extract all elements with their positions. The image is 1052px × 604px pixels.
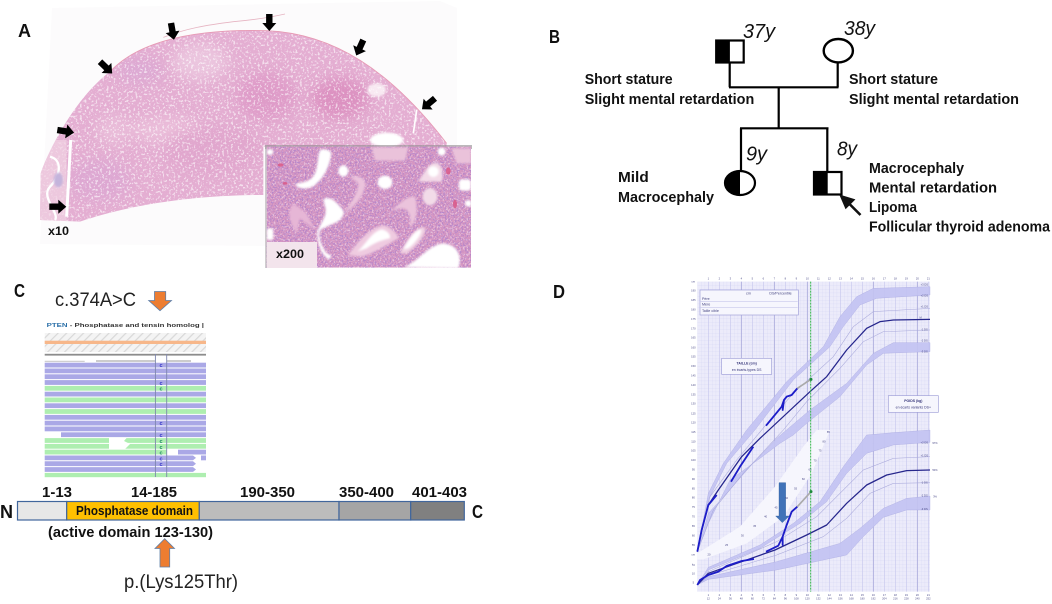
variant base calls: c (159, 439, 163, 445)
legend box: cm (746, 291, 751, 295)
axis tick labels: 140 (691, 383, 696, 387)
axis tick labels: 80 (692, 496, 695, 500)
axis tick labels: 10 (806, 593, 809, 597)
axis tick labels: 97% (932, 441, 938, 445)
patient weight measurements (697, 507, 797, 585)
heading: A: A (18, 21, 31, 41)
axis tick labels: 168 (849, 597, 854, 601)
axis tick labels: 60 (802, 477, 805, 481)
axis tick labels: 84 (773, 597, 776, 601)
ages: 37y (743, 21, 776, 43)
axis tick labels: 95 (692, 467, 695, 471)
daughter phenotype (618, 170, 714, 206)
weight label box: POIDS (kg) (904, 399, 922, 403)
target age marker (809, 282, 812, 592)
mother phenotype (849, 72, 1019, 108)
axis tick labels: 14 (850, 276, 853, 280)
axis tick labels: 70 (692, 515, 695, 519)
axis tick labels: 17 (883, 276, 886, 280)
label: x200 (267, 242, 317, 268)
father phenotype: Short stature (585, 72, 673, 88)
axis tick labels: 125 (691, 411, 696, 415)
pedigree connecting lines (729, 63, 838, 172)
variant label c.374A>C: c.374A>C (55, 290, 136, 311)
axis tick labels: +1 DS (921, 305, 928, 309)
axis tick labels: 30 (741, 534, 744, 538)
axis tick labels: 120 (805, 597, 810, 601)
axis tick labels: 25 (725, 543, 729, 547)
axis tick labels: 85 (692, 486, 695, 490)
axis tick labels: 13 (839, 593, 842, 597)
growth curves plot (691, 276, 938, 601)
axis tick labels: 65 (809, 468, 812, 472)
axis tick labels: 145 (691, 373, 696, 377)
axis tick labels: cm (692, 553, 696, 556)
axis tick labels: 5 (693, 581, 695, 585)
axis tick labels: +2 DS (921, 294, 928, 298)
axis tick labels: 21 (927, 276, 930, 280)
axis tick labels: 36 (729, 597, 732, 601)
weight scale band (697, 430, 830, 559)
axis tick labels: 130 (691, 402, 696, 406)
sequencing read viewer (45, 323, 206, 477)
panel B: pedigree (549, 18, 1051, 236)
variant base calls: c (159, 433, 163, 439)
axis tick labels: 2 (719, 593, 721, 597)
variant base calls: c (159, 386, 163, 392)
label: x200: x200 (276, 247, 304, 261)
axis tick labels: 40 (764, 515, 768, 519)
axis tick labels: 1 (708, 593, 710, 597)
plot grid (697, 282, 930, 592)
axis tick labels: 60 (692, 533, 695, 537)
weight label box: en écarts variants DS+ (896, 406, 931, 410)
heading: B: B (549, 27, 560, 47)
axis tick labels: 4 (741, 593, 743, 597)
mother symbol (824, 39, 853, 62)
axis tick labels: 228 (904, 597, 909, 601)
axis tick labels: cm (692, 280, 696, 283)
legend box: DS/Percentile (769, 291, 792, 295)
axis tick labels: 5 (752, 276, 754, 280)
axis tick labels: 1 (708, 276, 710, 280)
axis tick labels: 8 (785, 593, 787, 597)
mother phenotype: Short stature (849, 72, 938, 88)
viewer title: PTEN - Phosphatase and tensin homolog | (47, 323, 204, 329)
proband arrow (842, 196, 860, 215)
axis tick labels: 155 (691, 355, 696, 359)
father phenotype (585, 72, 754, 108)
axis tick labels: 10 (692, 571, 695, 575)
axis tick labels: 3 (730, 593, 732, 597)
axis tick labels: 12 (828, 593, 831, 597)
patient height measurements (697, 388, 797, 552)
axis tick labels: 5 (752, 593, 754, 597)
variant base calls: c (159, 450, 163, 456)
height label box: TAILLE (cm) (737, 362, 757, 366)
orange up arrow (155, 539, 174, 567)
axis tick labels: 11 (817, 593, 820, 597)
domain ranges: 1-13 (42, 485, 72, 501)
arrows marking the capsule (49, 14, 439, 214)
weight median (697, 470, 930, 585)
axis tick labels: 156 (838, 597, 843, 601)
proband phenotype: Mental retardation (869, 181, 997, 197)
axis tick labels: 80 (823, 439, 826, 443)
axis tick labels: 6 (763, 593, 765, 597)
axis tick labels: 16 (872, 593, 875, 597)
axis tick labels: 20 (916, 593, 919, 597)
variant base calls: c (159, 456, 163, 462)
panel A: histology (18, 1, 472, 268)
mother phenotype: Slight mental retardation (849, 92, 1019, 108)
axis tick labels: 20 (708, 552, 711, 556)
heading: C: C (14, 281, 25, 301)
ages: 9y (746, 144, 768, 166)
domain ranges: 14-185 (131, 485, 177, 501)
blue arrow (776, 483, 789, 523)
axis tick labels: 180 (860, 597, 865, 601)
axis tick labels: 18 (894, 593, 897, 597)
domain ranges: 350-400 (339, 485, 394, 501)
inset micrograph x200 (265, 145, 472, 268)
projected points (797, 378, 812, 507)
axis tick labels: 13 (839, 276, 842, 280)
axis tick labels: 20 (916, 276, 919, 280)
axis tick labels: 24 (718, 597, 721, 601)
daughter symbol (725, 171, 755, 195)
axis tick labels: 70 (814, 459, 817, 463)
axis tick labels: 85 (827, 430, 830, 434)
axis tick labels: 96 (784, 597, 787, 601)
axis tick labels: 19 (905, 276, 908, 280)
axis tick labels: 7 (774, 276, 776, 280)
axis tick labels: 21 (927, 593, 930, 597)
panel D: growth chart (553, 276, 938, 601)
axis tick labels: -2 DS (921, 494, 928, 498)
axis tick labels: 35 (753, 524, 757, 528)
axis tick labels: 185 (691, 298, 696, 302)
axis tick labels: -3 DS (921, 507, 928, 511)
axis tick labels: +1 DS (921, 454, 928, 458)
protein variant label: p.(Lys125Thr) (124, 572, 238, 593)
active domain label: (active domain 123-130) (48, 525, 213, 541)
axis tick labels: 204 (882, 597, 887, 601)
axis tick labels: 108 (794, 597, 799, 601)
axis tick labels: 55 (794, 487, 798, 491)
daughter phenotype: Mild (618, 170, 649, 186)
axis tick labels: 48 (740, 597, 743, 601)
weight percentile bands (697, 430, 930, 585)
axis tick labels (691, 276, 938, 601)
axis tick labels: 240 (915, 597, 920, 601)
axis tick labels: 192 (871, 597, 876, 601)
slide background (40, 1, 457, 246)
axis tick labels: 150 (691, 364, 696, 368)
axis tick labels: 17 (883, 593, 886, 597)
axis tick labels: 19 (905, 593, 908, 597)
axis tick labels: 100 (691, 458, 696, 462)
phosphatase domain label: Phosphatase domain (76, 503, 193, 518)
ages (743, 18, 876, 166)
domain ranges: 190-350 (240, 485, 295, 501)
axis tick labels: 3 (730, 276, 732, 280)
weight label box (888, 396, 938, 412)
protein domain bar (18, 502, 464, 520)
axis tick labels: 175 (691, 317, 696, 321)
axis tick labels: 16 (872, 276, 875, 280)
variant column (155, 354, 167, 477)
axis tick labels: 105 (691, 449, 696, 453)
height label box (722, 358, 772, 374)
variant base calls: c (159, 462, 163, 468)
height percentile bands (697, 287, 930, 552)
legend box: Mère (702, 303, 710, 307)
C terminus: C (472, 502, 483, 522)
legend box: Taille cible (702, 309, 719, 313)
axis tick labels: 165 (691, 336, 696, 340)
variant base calls: c (159, 445, 163, 451)
ages: 8y (837, 139, 858, 161)
axis tick labels: kg (692, 562, 695, 566)
domain ranges (42, 485, 467, 501)
height label box: en écarts-types DS (732, 368, 762, 372)
axis tick labels: 75 (692, 505, 695, 509)
axis tick labels: 7 (774, 593, 776, 597)
axis tick labels: 2 (719, 276, 721, 280)
N terminus: N (0, 502, 13, 522)
label: x10: x10 (48, 224, 69, 238)
axis tick labels: 12 (707, 597, 710, 601)
father symbol (716, 40, 744, 62)
axis tick labels: 50% (932, 468, 938, 472)
orange down arrow (149, 292, 172, 311)
ages: 38y (844, 18, 876, 40)
axis tick labels: 90 (692, 477, 695, 481)
axis tick labels: 65 (692, 524, 695, 528)
variant base calls: c (159, 363, 163, 369)
proband phenotype: Macrocephaly (869, 161, 964, 177)
legend box (700, 290, 798, 315)
proband phenotype: Follicular thyroid adenoma (869, 220, 1051, 236)
axis tick labels: 18 (894, 276, 897, 280)
low-power tissue section x10 (33, 14, 453, 227)
axis tick labels: -1 DS (921, 327, 928, 331)
father phenotype: Slight mental retardation (585, 92, 754, 108)
axis tick labels: 14 (850, 593, 853, 597)
panel C: sequencing and protein domains (0, 281, 483, 593)
axis tick labels: 135 (691, 392, 696, 396)
axis tick labels: -3 DS (921, 350, 928, 354)
axis tick labels: 8 (785, 276, 787, 280)
axis tick labels: 216 (893, 597, 898, 601)
daughter phenotype: Macrocephaly (618, 190, 714, 206)
axis tick labels: 15 (861, 593, 864, 597)
axis tick labels: 110 (691, 439, 696, 443)
axis tick labels: 120 (691, 421, 696, 425)
proband phenotype (869, 161, 1051, 236)
axis tick labels: 10 (806, 276, 809, 280)
axis tick labels: 72 (762, 597, 765, 601)
axis tick labels: 9 (796, 593, 798, 597)
axis tick labels: 9 (796, 276, 798, 280)
axis tick labels: -2 DS (921, 339, 928, 343)
axis tick labels: 170 (691, 326, 696, 330)
variant base calls: c (159, 421, 163, 427)
axis tick labels: 190 (691, 289, 696, 293)
axis tick labels: 11 (817, 276, 820, 280)
axis tick labels: 15 (861, 276, 864, 280)
son symbol (814, 172, 842, 194)
variant base calls (159, 363, 163, 468)
variant base calls: c (159, 381, 163, 387)
axis tick labels: 75 (819, 449, 822, 453)
axis tick labels: 55 (692, 543, 695, 547)
axis tick labels: 4 (741, 276, 743, 280)
axis tick labels: -1 DS (921, 480, 928, 484)
axis tick labels: 12 (828, 276, 831, 280)
axis tick labels: 3% (933, 495, 938, 499)
axis tick labels: 160 (691, 345, 696, 349)
proband phenotype: Lipoma (869, 200, 918, 216)
axis tick labels: 252 (926, 597, 931, 601)
height median (697, 319, 930, 552)
axis tick labels: 144 (827, 597, 832, 601)
axis tick labels: 45 (775, 505, 778, 509)
axis tick labels: 50 (785, 496, 789, 500)
sequencing reads (45, 363, 206, 477)
weight percentile lines (697, 457, 930, 585)
axis tick labels: 115 (691, 430, 696, 434)
axis tick labels: 6 (763, 276, 765, 280)
axis tick labels: 180 (691, 307, 696, 311)
axis tick labels: 132 (816, 597, 821, 601)
domain ranges: 401-403 (412, 485, 467, 501)
axis tick labels: +2 DS (921, 440, 928, 444)
heading: D: D (553, 282, 565, 302)
axis tick labels: M (920, 316, 922, 320)
axis tick labels: 60 (751, 597, 754, 601)
height percentile lines (697, 308, 930, 552)
legend box: Père (702, 297, 710, 301)
axis tick labels: +3 DS (921, 282, 928, 286)
